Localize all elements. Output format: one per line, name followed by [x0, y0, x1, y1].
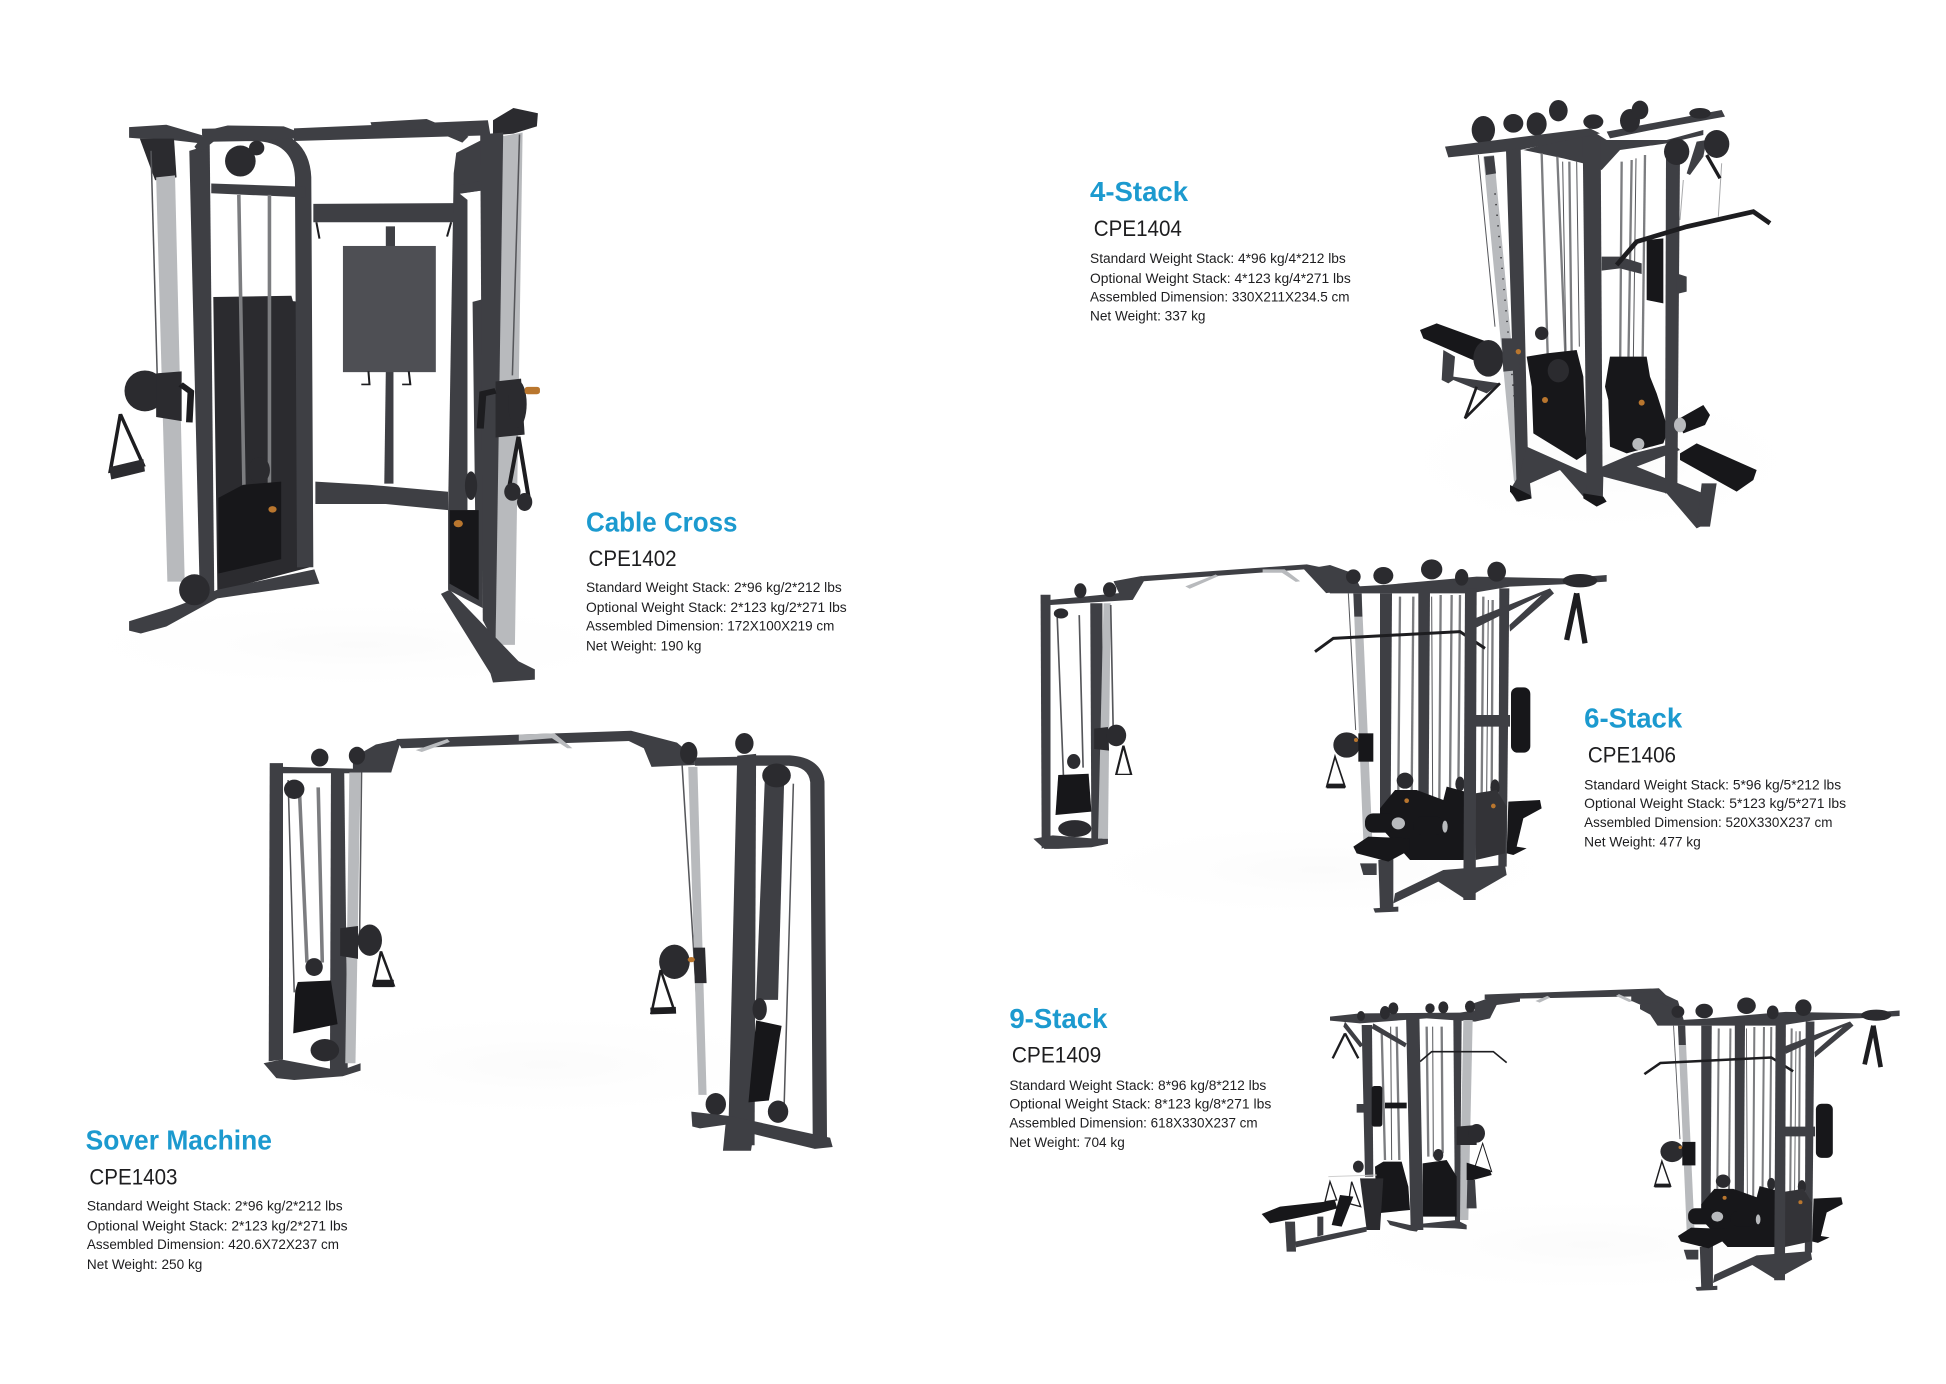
model number: CPE1404: CPE1404 [1094, 216, 1182, 241]
model number: CPE1403: CPE1403 [89, 1164, 178, 1189]
specifications: CPE1402: Net Weight: 190 kg [586, 639, 701, 655]
heading: Sover Machine: Sover Machine [86, 1125, 272, 1156]
specifications: CPE1406: Net Weight: 477 kg [1584, 835, 1701, 851]
heading: 6-Stack: 6-Stack [1584, 703, 1683, 734]
model number: CPE1406: CPE1406 [1588, 742, 1676, 767]
specifications: CPE1403: Assembled Dimension: 420.6X72X237 cm [87, 1237, 339, 1253]
model number: CPE1402: CPE1402 [588, 546, 677, 571]
heading: 4-Stack: 4-Stack [1090, 176, 1189, 207]
specifications: CPE1404: Optional Weight Stack: 4*123 kg/4*271 lbs [1090, 271, 1351, 287]
specifications: CPE1406 [1584, 778, 1846, 851]
model number: CPE1409: CPE1409 [1012, 1043, 1101, 1068]
specifications: CPE1404: Assembled Dimension: 330X211X234.5 cm [1090, 290, 1350, 306]
specifications: CPE1402 [586, 580, 847, 655]
specifications: CPE1403: Standard Weight Stack: 2*96 kg/2*212 lbs [87, 1198, 343, 1214]
specifications: CPE1409: Standard Weight Stack: 8*96 kg/8*212 lbs [1009, 1078, 1266, 1094]
text: Sover Machine [86, 1125, 348, 1273]
machine: 6-Stack, single stack and arch [1033, 564, 1351, 849]
specifications: CPE1403 [87, 1198, 348, 1273]
specifications: CPE1403: Net Weight: 250 kg [87, 1257, 202, 1273]
specifications: CPE1406: Standard Weight Stack: 5*96 kg/5*212 lbs [1584, 778, 1841, 794]
specifications: CPE1409: Optional Weight Stack: 8*123 kg/8*271 lbs [1009, 1097, 1271, 1113]
machine: Sover Machine [264, 731, 833, 1151]
specifications: CPE1404 [1090, 251, 1351, 324]
machine: 6-Stack, five-stack tower [1310, 559, 1607, 913]
specifications: CPE1409 [1009, 1078, 1271, 1151]
specifications: CPE1404: Standard Weight Stack: 4*96 kg/4*212 lbs [1090, 251, 1346, 267]
text: Cable Cross [586, 506, 847, 655]
specifications: CPE1402: Assembled Dimension: 172X100X219 cm [586, 619, 834, 635]
text: 6-Stack [1584, 703, 1846, 851]
machine: 9-Stack, left tower [1262, 997, 1520, 1252]
machine: Cable Cross [109, 108, 540, 682]
heading: 9-Stack: 9-Stack [1009, 1003, 1108, 1034]
text: 4-Stack [1090, 176, 1351, 324]
specifications: CPE1406: Assembled Dimension: 520X330X237 cm [1584, 815, 1832, 831]
specifications: CPE1409: Net Weight: 704 kg [1009, 1135, 1125, 1151]
specifications: CPE1402: Optional Weight Stack: 2*123 kg/2*271 lbs [586, 600, 847, 616]
specifications: CPE1402: Standard Weight Stack: 2*96 kg/2*212 lbs [586, 580, 842, 596]
heading: Cable Cross: Cable Cross [586, 506, 737, 537]
text: 9-Stack [1009, 1003, 1271, 1151]
specifications: CPE1409: Assembled Dimension: 618X330X237 cm [1009, 1115, 1258, 1131]
machine: 4-Stack [1420, 100, 1770, 528]
specifications: CPE1404: Net Weight: 337 kg [1090, 308, 1206, 324]
specifications: CPE1406: Optional Weight Stack: 5*123 kg/5*271 lbs [1584, 796, 1846, 812]
machine: 9-Stack, top bridge [1485, 988, 1667, 1003]
machine: 9-Stack, right tower [1631, 991, 1900, 1291]
specifications: CPE1403: Optional Weight Stack: 2*123 kg/2*271 lbs [87, 1218, 348, 1234]
